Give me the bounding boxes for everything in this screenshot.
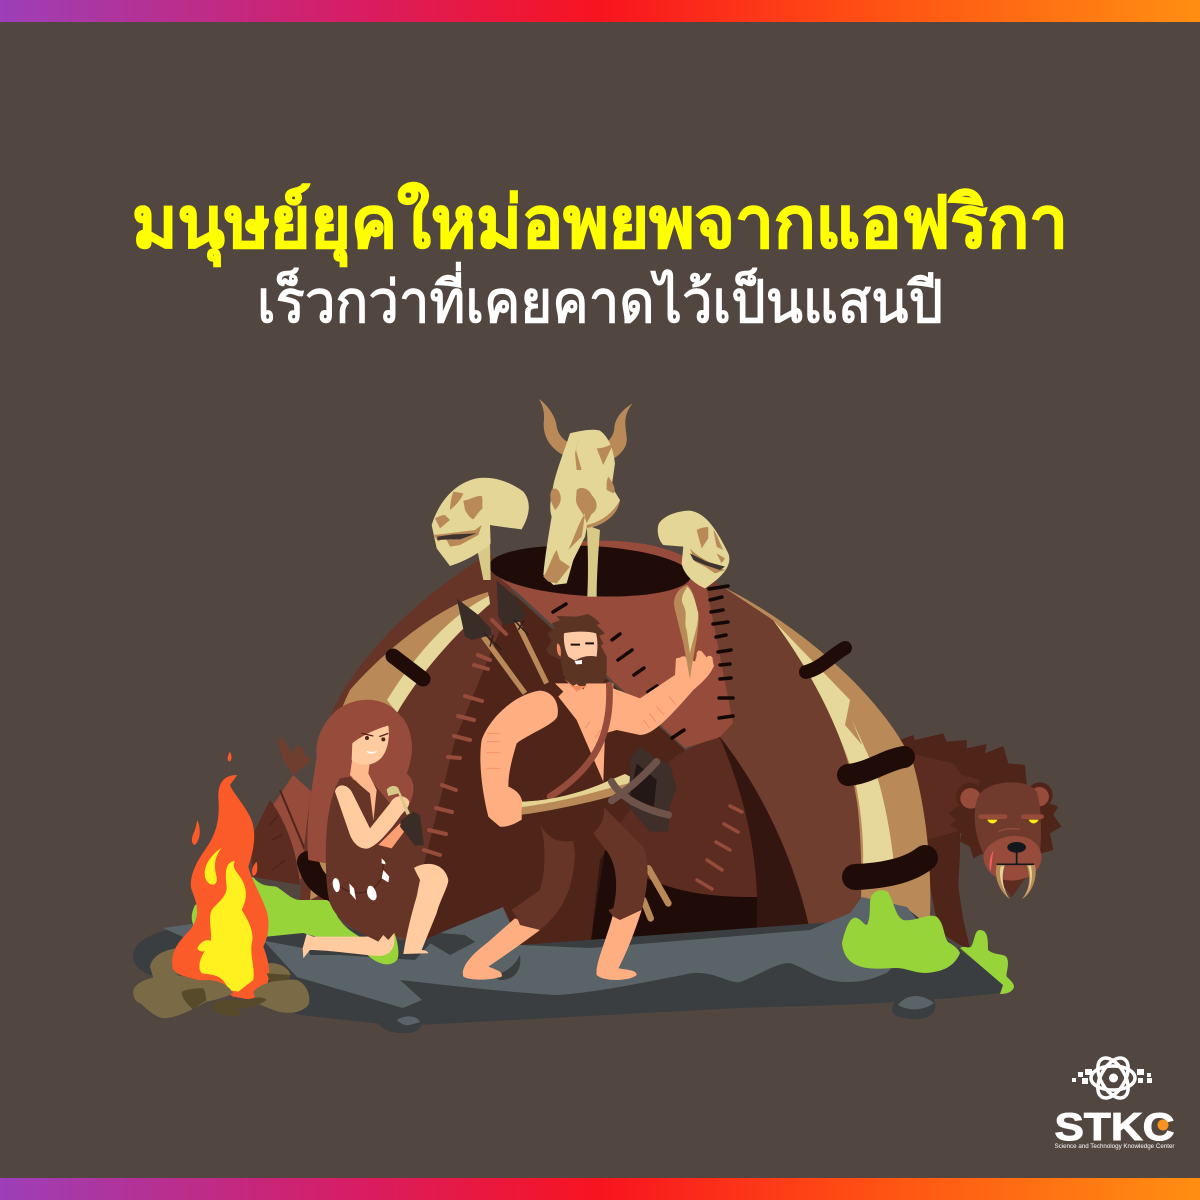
logo tagline: Science and Technology Knowledge Center [1054,1144,1175,1150]
bear [900,733,1062,948]
skull: ox skull on stake [539,399,633,597]
bindings and stitches [308,586,925,890]
woman arm [335,785,409,849]
campfire [133,752,309,1018]
flame outer [172,775,269,1000]
logo wordmark: STKC [1054,1106,1174,1149]
man tunic [507,685,607,841]
flame inner [199,861,254,992]
logo pixel squares [1072,1069,1152,1084]
back club ends [643,868,668,918]
stones back [150,948,291,982]
spears [457,581,547,693]
man stone axe [627,747,677,832]
skull: right primate skull on stake [658,511,729,588]
necklace [333,860,383,893]
man raised hand fingers [678,651,714,677]
woman stone tool [387,786,410,815]
subtitle: เร็วกว่าที่เคยคาดไว้เป็นแสนปี [257,262,943,335]
STKC logo [1054,1053,1175,1150]
woman dress [326,777,420,942]
top gradient bar [0,0,1200,22]
dome hut [300,541,930,950]
illustration: cave people camp [133,399,1062,1033]
ground rock [133,897,1005,1033]
stones front [133,975,233,1018]
man sash [550,685,610,797]
man [463,614,714,980]
man raised club [674,585,699,679]
woman [303,700,448,958]
woman face [352,726,389,765]
small hut behind woman [250,737,320,885]
man legs [463,918,540,980]
green moss [192,877,1014,994]
man torso and arms [555,650,713,782]
logo atom icon [1091,1053,1135,1103]
man trousers [512,807,648,930]
bottom gradient bar [0,1178,1200,1200]
woman hair [307,700,414,863]
title: มนุษย์ยุคใหม่อพยพจากแอฟริกา [132,181,1068,267]
strap on left rib [393,656,423,679]
woman legs [403,864,448,954]
logo orange dot [1158,1120,1168,1130]
man head [546,614,607,689]
man bone club [520,774,630,815]
man fist [487,790,522,827]
skull: left primate skull on stake [432,478,529,580]
woman neck and chest [350,758,377,822]
